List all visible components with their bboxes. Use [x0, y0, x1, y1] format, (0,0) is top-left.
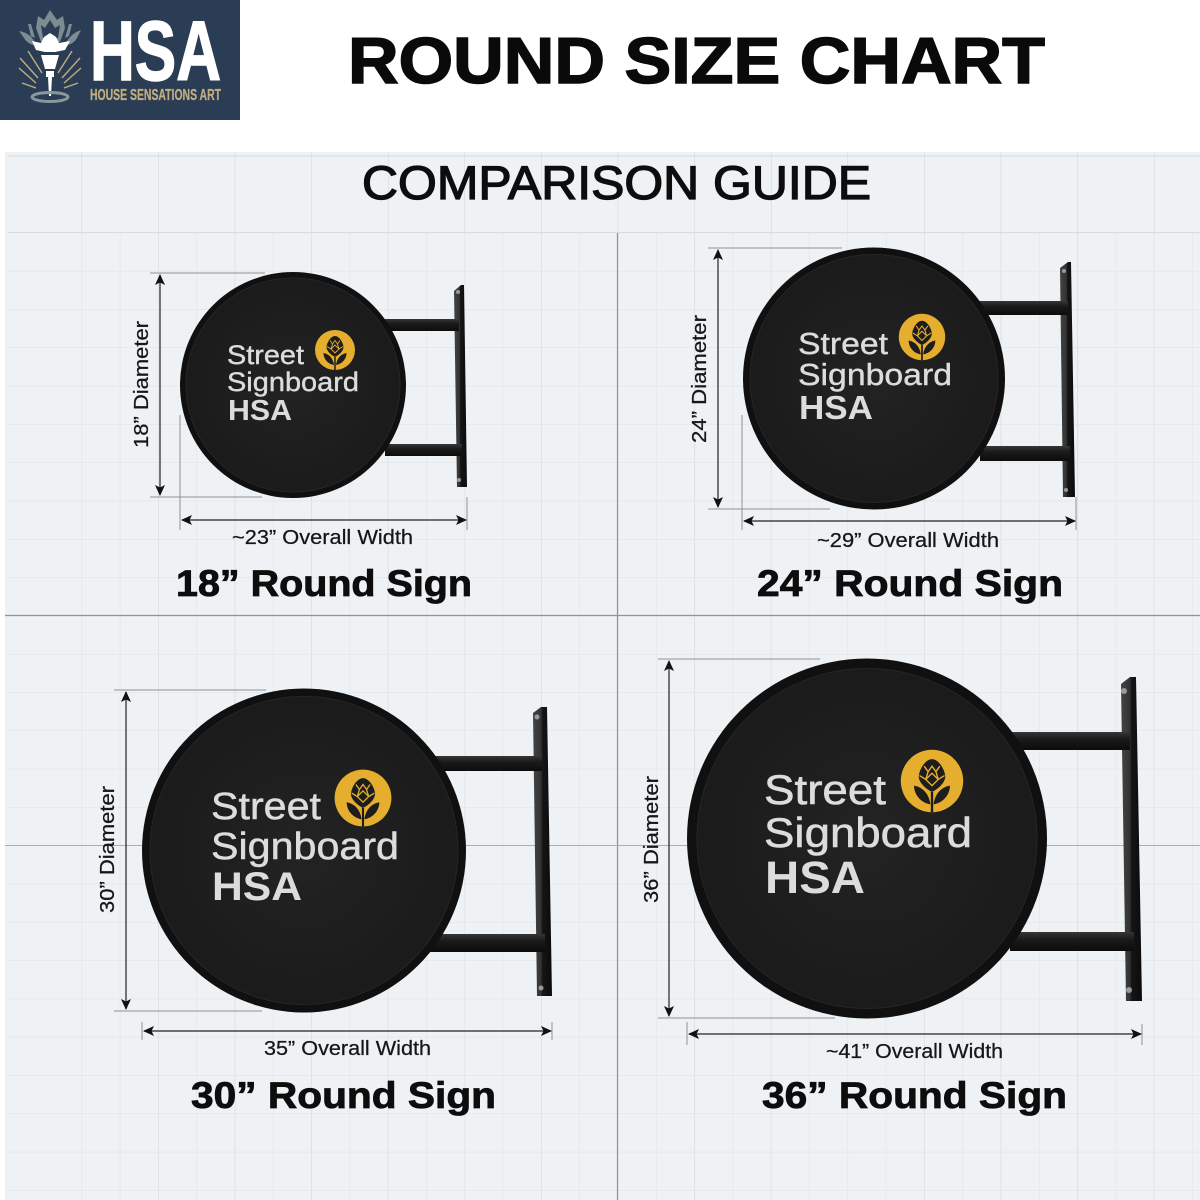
panel: 30 inch sign: Signboard — [211, 826, 399, 868]
bracket: 18 inch — [385, 285, 467, 487]
width label: 30 inch: 35” Overall Width — [264, 1038, 431, 1060]
dimension lines: 18 inch — [150, 273, 467, 530]
icon: hop logo 36 inch — [901, 750, 963, 812]
sign face: 18 inch — [180, 272, 406, 498]
panel: 24 inch sign — [689, 248, 1076, 604]
panel: 30 inch sign — [97, 688, 552, 1116]
width label: 36 inch: ~41” Overall Width — [826, 1041, 1003, 1063]
panel: 18 inch sign — [131, 272, 472, 604]
sign text: 18 inch: Street — [227, 340, 305, 370]
bracket: 24 inch — [980, 262, 1075, 497]
logo wordmark: HSA — [90, 4, 221, 98]
sign text: 30 inch: Street — [211, 786, 321, 828]
panel: 24 inch sign: HSA — [799, 389, 873, 426]
width label: 18 inch: ~23” Overall Width — [232, 527, 413, 549]
panel: 36 inch sign: HSA — [765, 852, 865, 903]
diameter label: 24 inch: 24” Diameter — [689, 315, 711, 443]
sign face: 24 inch — [743, 248, 1005, 510]
icon: hop logo 18 inch — [315, 330, 355, 370]
dimension lines: 30 inch — [114, 690, 552, 1040]
sign name: 30 inch: 30” Round Sign — [191, 1075, 496, 1116]
icon: torch with lotus flame — [19, 10, 81, 102]
title: ROUND SIZE CHART — [348, 24, 1045, 97]
icon: hop logo 30 inch — [335, 770, 391, 826]
panel: 24 inch sign: Signboard — [798, 357, 952, 392]
diameter label: 18 inch: 18” Diameter — [131, 321, 153, 448]
logo tagline: HOUSE SENSATIONS ART — [90, 87, 221, 104]
sign text: 36 inch: Street — [764, 766, 886, 813]
bracket: 30 inch — [430, 707, 552, 996]
dimension lines: 24 inch — [708, 248, 1076, 530]
width label: 24 inch: ~29” Overall Width — [817, 530, 999, 552]
panel: 36 inch sign — [641, 658, 1142, 1116]
sign name: 24 inch: 24” Round Sign — [757, 563, 1063, 604]
diameter label: 30 inch: 30” Diameter — [97, 786, 119, 913]
bracket: 36 inch — [1010, 677, 1142, 1001]
sign face: 30 inch — [142, 688, 466, 1012]
sign face: 36 inch — [687, 658, 1047, 1018]
heading: comparison guide: COMPARISON GUIDE — [362, 156, 871, 209]
sign text: 24 inch: Street — [798, 326, 888, 361]
icon: hop logo 24 inch — [899, 314, 945, 360]
logo: HSA House Sensations Art — [0, 0, 240, 120]
dimension lines: 36 inch — [658, 659, 1142, 1045]
sign name: 18 inch: 18” Round Sign — [176, 563, 472, 604]
panel: 30 inch sign: HSA — [212, 865, 302, 909]
sign name: 36 inch: 36” Round Sign — [762, 1075, 1067, 1116]
panel: 18 inch sign: HSA — [228, 395, 292, 427]
diameter label: 36 inch: 36” Diameter — [641, 776, 663, 903]
panel: 18 inch sign: Signboard — [227, 367, 359, 397]
panel: 36 inch sign: Signboard — [764, 809, 972, 856]
